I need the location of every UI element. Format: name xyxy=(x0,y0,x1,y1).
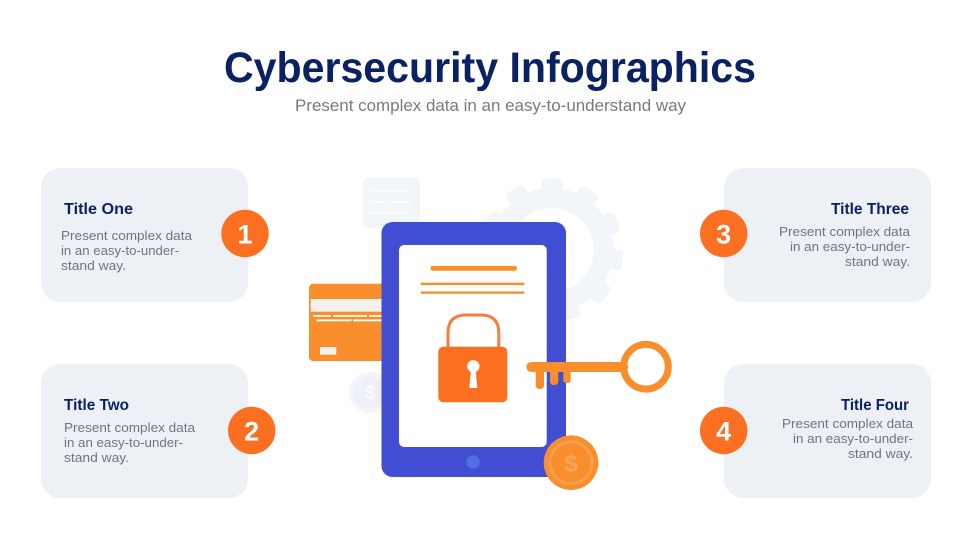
number badge 3 xyxy=(700,210,747,257)
text block: title four body: in an easy-to-under- xyxy=(793,431,913,446)
text block: title three body xyxy=(779,224,911,269)
panel: title two xyxy=(41,364,275,498)
panel: title three xyxy=(700,168,931,302)
number badge 1: 1 xyxy=(237,220,253,250)
number badge 4 xyxy=(700,407,747,454)
text block: title one body xyxy=(61,228,193,273)
heading: title four: Title Four xyxy=(841,397,909,414)
heading: title one: Title One xyxy=(64,201,133,218)
number badge 2: 2 xyxy=(244,416,259,446)
text block: title three body: Present complex data xyxy=(779,224,911,239)
panel: title four xyxy=(700,364,931,498)
heading: title two: Title Two xyxy=(64,397,129,414)
icon: key xyxy=(526,344,668,389)
text block: title four body: stand way. xyxy=(848,446,913,461)
number badge 3: 3 xyxy=(716,220,731,250)
text block: title four body xyxy=(782,416,914,461)
number badge 1 xyxy=(221,210,269,257)
text block: title four body: Present complex data xyxy=(782,416,914,431)
icon: dollar coin: $ xyxy=(564,450,578,478)
text block: title two body: Present complex data xyxy=(64,420,196,435)
text block: title two body xyxy=(64,420,196,465)
text block: title three body: in an easy-to-under- xyxy=(790,239,910,254)
icon: tablet xyxy=(382,222,566,477)
panel: title one xyxy=(41,168,269,302)
text block: title one body: in an easy-to-under- xyxy=(61,243,179,258)
tablet home button xyxy=(466,455,480,469)
keyhole xyxy=(467,360,479,388)
icon: padlock xyxy=(438,315,507,402)
icon: faded coin: $ xyxy=(365,383,375,403)
tablet screen xyxy=(399,245,547,447)
text block: title two body: stand way. xyxy=(64,450,129,465)
document lines xyxy=(421,266,524,294)
subtitle: Present complex data in an easy-to-understand way xyxy=(295,96,686,115)
text block: title one body: Present complex data xyxy=(61,228,193,243)
icon: credit card xyxy=(309,284,389,361)
text block: title one body: stand way. xyxy=(61,258,126,273)
icon: dollar coin xyxy=(544,435,598,490)
icon: faded coin xyxy=(349,372,391,413)
number badge 4: 4 xyxy=(716,416,731,446)
icon: faded gear xyxy=(483,178,624,322)
title: Cybersecurity Infographics xyxy=(224,44,756,92)
number badge 2 xyxy=(228,407,275,454)
text block: title two body: in an easy-to-under- xyxy=(64,435,183,450)
icon: faded document xyxy=(363,178,420,228)
heading: title three: Title Three xyxy=(831,201,909,218)
text block: title three body: stand way. xyxy=(845,254,910,269)
